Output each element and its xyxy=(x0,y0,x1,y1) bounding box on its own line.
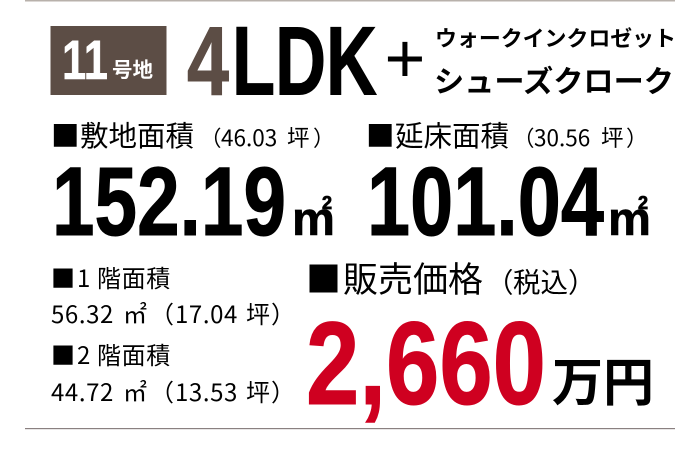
floor area label: 30.56 xyxy=(534,121,590,153)
price value: 2,660 xyxy=(306,298,546,430)
second floor area xyxy=(51,336,295,408)
first floor area: ■ xyxy=(51,259,75,294)
heading: floor plan type: 4 xyxy=(187,6,229,116)
heading: floor plan type xyxy=(187,6,377,116)
floor area label: ） xyxy=(626,122,648,153)
site area label: 敷地面積 xyxy=(80,114,194,155)
site area label: 坪 xyxy=(287,121,310,153)
first floor area: 1 xyxy=(77,259,90,294)
site area xyxy=(51,114,335,256)
price label: 税込 xyxy=(513,260,568,300)
first floor area: ㎡ xyxy=(123,295,147,330)
text block: storage features: シューズクローク xyxy=(434,57,674,101)
site area label: （ xyxy=(200,122,222,153)
site area label: ） xyxy=(313,122,335,153)
site area label: ■ xyxy=(51,114,80,155)
heading: floor plan type: LDK xyxy=(232,6,377,116)
floor area value: 2 xyxy=(638,193,648,213)
second floor area: ㎡ xyxy=(123,373,147,408)
first floor area: 17.04 xyxy=(175,295,238,330)
floor area label: （ xyxy=(513,122,535,153)
second floor area: ■ xyxy=(51,336,75,371)
badge: lot number: 号地 xyxy=(112,53,153,83)
price label: 販売価格 xyxy=(343,252,483,303)
second floor area: 13.53 xyxy=(175,373,238,408)
text block: storage features xyxy=(434,22,676,101)
price value: 万円 xyxy=(552,341,654,416)
text block: storage features: ウォークインクロゼット xyxy=(435,22,676,53)
first floor area: 坪 xyxy=(246,295,270,330)
floor area value: 101.04 xyxy=(367,147,604,256)
floor area xyxy=(366,114,651,256)
second floor area: 44.72 xyxy=(51,373,114,408)
price label: ） xyxy=(568,260,596,300)
site area value: 2 xyxy=(322,193,332,213)
floor area label: 坪 xyxy=(601,121,624,153)
first floor area: （ xyxy=(150,295,174,330)
second floor area: 2 xyxy=(77,336,90,371)
floor area label: 延床面積 xyxy=(395,114,509,155)
plus sign: + xyxy=(385,19,425,97)
second floor area: 階面積 xyxy=(97,336,171,371)
second floor area: 坪 xyxy=(246,373,270,408)
first floor area: 階面積 xyxy=(97,259,171,294)
first floor area: ） xyxy=(271,295,295,330)
badge: lot number: 11 xyxy=(62,28,108,91)
site area value: m xyxy=(292,192,335,245)
second floor area: ） xyxy=(271,373,295,408)
site area value: 152.19 xyxy=(52,147,286,256)
badge: lot number xyxy=(50,26,166,95)
floor area value: m xyxy=(608,192,651,245)
price label: ■ xyxy=(306,252,341,303)
first floor area xyxy=(51,259,295,330)
floor area label: ■ xyxy=(366,114,395,155)
price label: （ xyxy=(486,260,514,300)
site area label: 46.03 xyxy=(221,121,277,153)
second floor area: （ xyxy=(150,373,174,408)
first floor area: 56.32 xyxy=(51,295,114,330)
